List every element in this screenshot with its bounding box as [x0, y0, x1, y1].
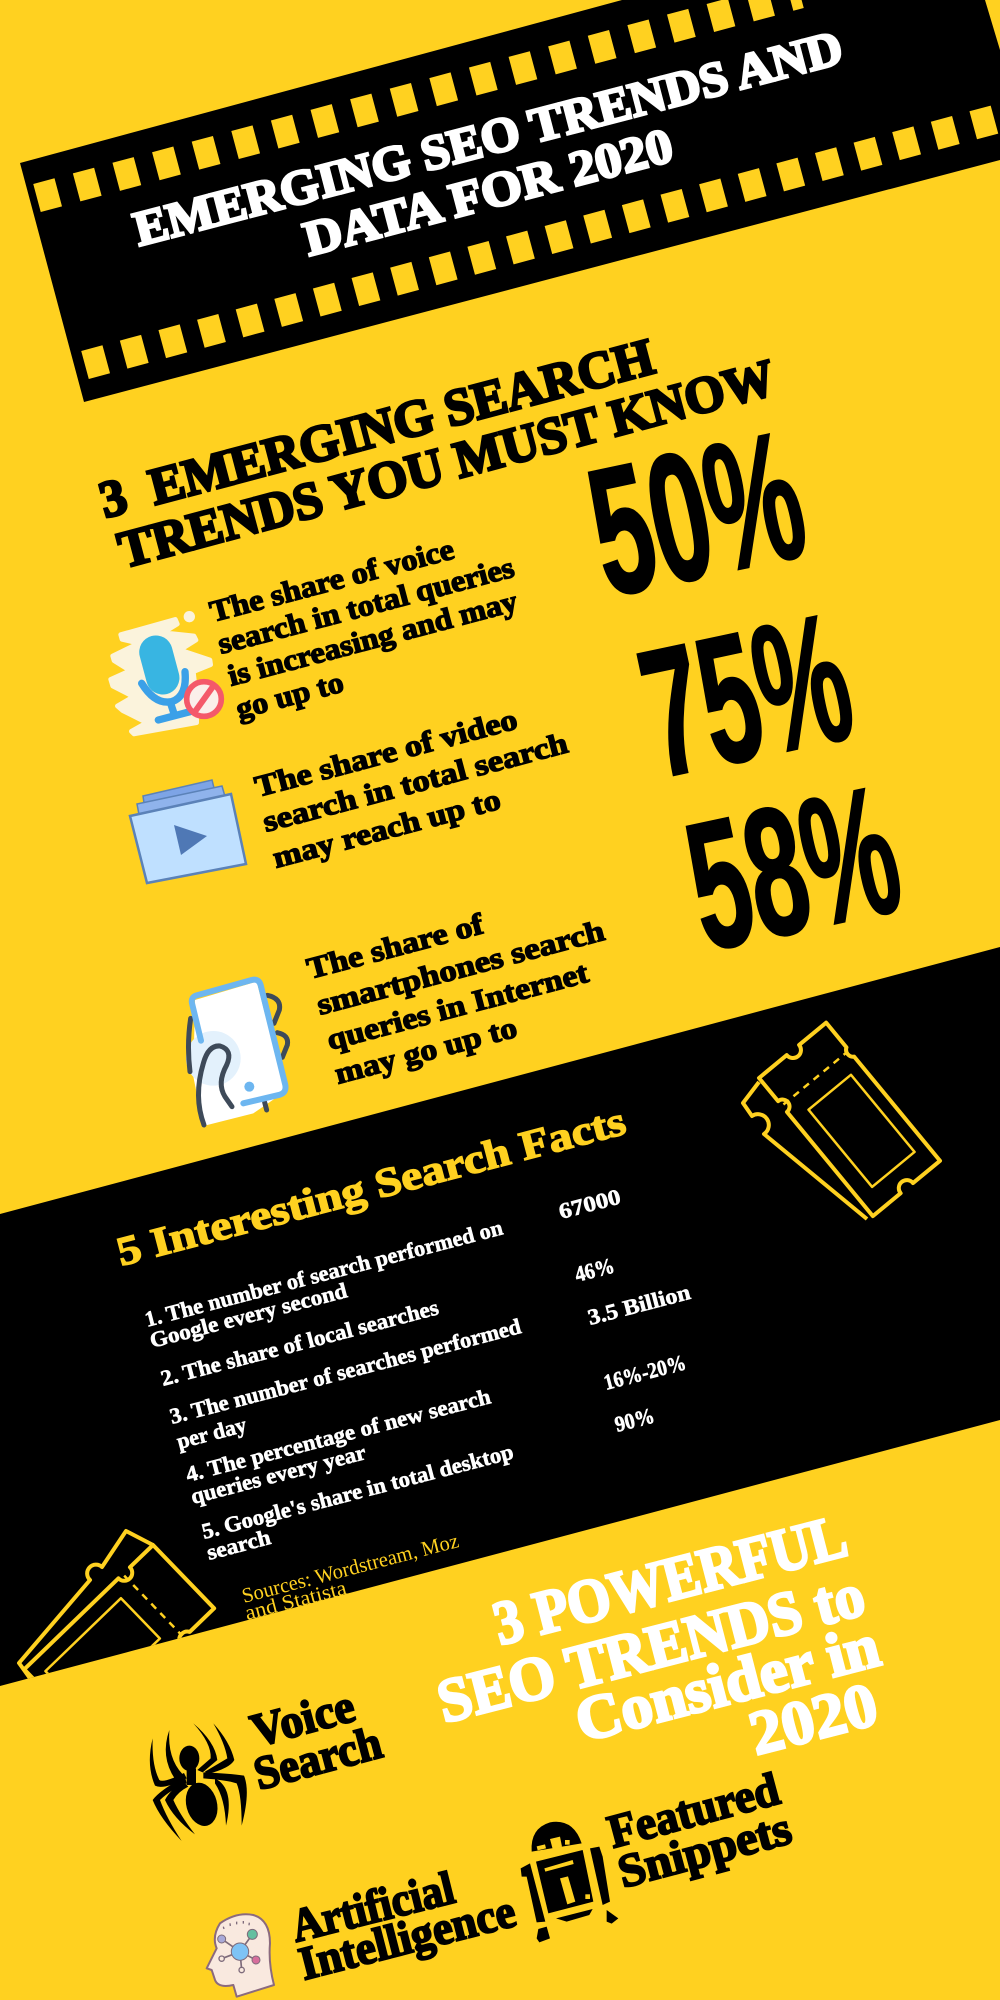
facts list [142, 1215, 524, 1565]
sources: Sources: Wordstream, Moz [239, 1528, 461, 1608]
label: featured snippets [602, 1763, 797, 1899]
icon: spider [150, 1723, 247, 1841]
label: featured snippets: Featured [602, 1763, 785, 1859]
facts list: queries every year [188, 1439, 369, 1509]
text: video search share [251, 703, 572, 875]
text: voice search share: search in total queries [214, 551, 518, 661]
text: smartphone search share [303, 907, 608, 1091]
text: video search share: may reach up to [269, 783, 504, 875]
text: smartphone search share: may go up to [331, 1011, 521, 1091]
stat: 50%: 50% [573, 392, 821, 635]
facts list: per day [174, 1412, 249, 1454]
title: DATA FOR 2020 [298, 117, 678, 267]
facts list: 4. The percentage of new search [183, 1383, 493, 1487]
facts list: search [204, 1524, 273, 1565]
facts values: 90% [612, 1403, 657, 1437]
heading: 5 interesting search facts: 5 Interesting Search Facts [112, 1097, 630, 1275]
facts list: Google every second [147, 1277, 350, 1353]
icon: tickets top right [743, 1023, 940, 1219]
text: voice search share: The share of voice [206, 533, 457, 629]
facts list: 3. The number of searches performed [167, 1313, 524, 1429]
facts values: 3.5 Billion [585, 1279, 693, 1330]
facts values: 67000 [556, 1184, 623, 1224]
text: smartphone search share: smartphones search [313, 914, 608, 1022]
heading: 3 powerful seo trends: Consider in [568, 1612, 887, 1756]
label: voice search: Search [248, 1717, 387, 1801]
icon: head with network [207, 1914, 274, 1997]
label: voice search [245, 1680, 387, 1801]
text: video search share: search in total search [259, 727, 572, 839]
sources: and Statista [242, 1575, 350, 1625]
text: smartphone search share: queries in Internet [323, 956, 592, 1057]
heading: 3 powerful seo trends [430, 1502, 887, 1769]
heading: 3 powerful seo trends: 3 POWERFUL [486, 1502, 854, 1659]
facts values: 16%-20% [601, 1349, 689, 1395]
heading: 3 powerful seo trends: SEO TRENDS to [430, 1561, 872, 1737]
label: featured snippets: Snippets [612, 1803, 797, 1899]
facts values [556, 1184, 693, 1437]
heading: 3 powerful seo trends: 2020 [742, 1670, 884, 1769]
title: EMERGING SEO TRENDS AND [128, 19, 848, 257]
panel: film strip header [20, 0, 1000, 402]
icon: microphone with blocked sign [111, 611, 221, 734]
text: smartphone search share: The share of [303, 907, 488, 986]
text: voice search share: go up to [232, 666, 347, 726]
facts list: 2. The share of local searches [158, 1294, 441, 1391]
heading: 3 emerging search trends: 3 EMERGING SEARCH [94, 329, 660, 530]
text: voice search share: is increasing and may [224, 585, 521, 693]
heading: 3 emerging search trends: TRENDS YOU MUST KNOW [112, 349, 781, 580]
facts values: 46% [572, 1253, 617, 1287]
label: artificial intelligence: Artificial [286, 1862, 460, 1953]
icon: smartphone in hand [186, 980, 288, 1126]
icon: tickets bottom left [16, 1528, 216, 1678]
label: voice search: Voice [245, 1680, 360, 1758]
icon: droid robot [521, 1822, 618, 1942]
text: video search share: The share of video [251, 703, 521, 804]
facts list: 5. Google's share in total desktop [199, 1439, 516, 1544]
facts list: 1. The number of search performed on [142, 1215, 505, 1332]
label: artificial intelligence: Intelligence [294, 1885, 521, 1991]
icon: video folder [130, 780, 246, 883]
panel: black search facts band [0, 947, 1000, 1733]
text: voice search share [206, 533, 521, 726]
